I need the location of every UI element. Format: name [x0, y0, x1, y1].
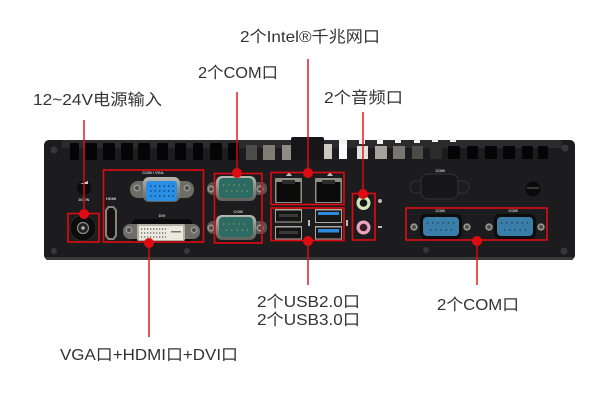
small port labels: DC IN [79, 197, 90, 202]
label: LAN: 2个Intel®千兆网口 [240, 28, 380, 46]
callout: audio [358, 112, 368, 199]
center latch [291, 137, 324, 160]
callout: USB [303, 236, 313, 285]
corner screws [50, 144, 568, 254]
callout: LAN [303, 59, 313, 178]
small port labels: HDMI [106, 196, 116, 201]
power switch [77, 181, 91, 195]
small port labels: COM [233, 209, 243, 214]
small port labels: DVI [159, 213, 165, 218]
small port labels [79, 168, 518, 218]
COM ports left [207, 176, 267, 240]
power knob [526, 182, 540, 196]
heatsink slots: lit center [246, 143, 442, 160]
audio and network icons [286, 169, 382, 228]
label: audio: 2个音频口 [324, 89, 403, 107]
callout: COM right [472, 236, 482, 285]
small port labels: COM / VGA [142, 170, 164, 175]
USB ports [275, 209, 342, 240]
heatsink slots: dark left [70, 143, 239, 160]
audio jacks [356, 196, 370, 234]
small port labels: COM [508, 208, 518, 213]
HDMI port [105, 206, 117, 240]
VGA port [130, 177, 194, 202]
heatsink slots: dark right [448, 146, 548, 159]
device chassis [44, 137, 575, 260]
label: USB 3.0: 2个USB3.0口 [257, 311, 360, 329]
label: COM left: 2个COM口 [198, 64, 278, 82]
LAN ports [275, 178, 342, 203]
COM ports right [410, 214, 545, 239]
small port labels: COM [435, 168, 445, 173]
red highlight boxes [68, 170, 547, 243]
label: COM right: 2个COM口 [437, 296, 519, 314]
DC jack [70, 215, 96, 241]
callout: COM left [232, 92, 242, 178]
unused COM cutout [410, 174, 469, 199]
label: power: 12~24V电源输入 [33, 91, 162, 109]
heatsink band [62, 140, 562, 148]
small port labels: COM [435, 208, 445, 213]
DVI port [123, 219, 200, 242]
callout: video outputs [144, 238, 154, 337]
top notches [339, 139, 456, 144]
label: USB 2.0: 2个USB2.0口 [257, 293, 360, 311]
label: video: VGA口+HDMI口+DVI口 [60, 347, 238, 364]
callout: power input [79, 120, 89, 219]
